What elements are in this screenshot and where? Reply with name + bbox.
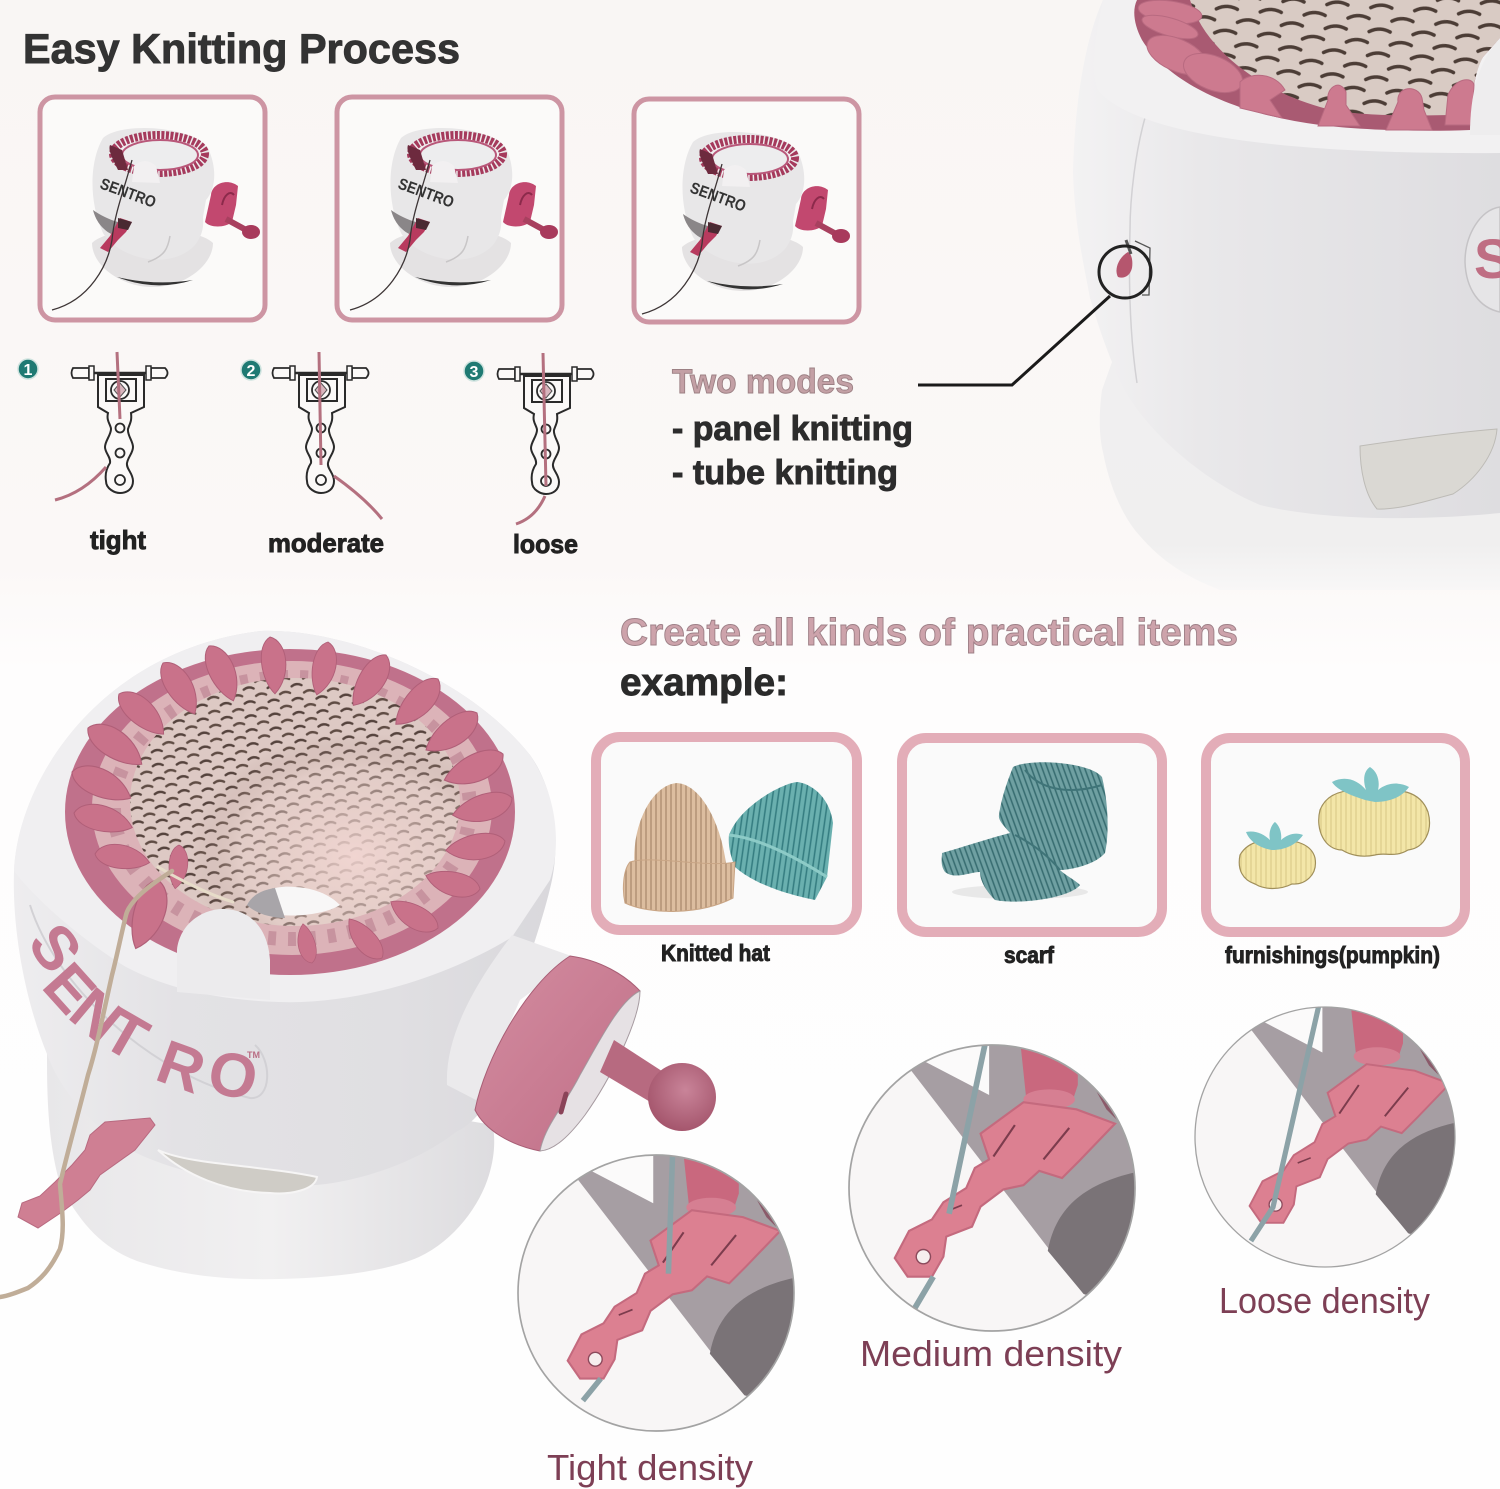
panel: loose density: [1195, 1004, 1468, 1267]
icon: scarf: [942, 762, 1108, 902]
label: tight density: Tight density: [547, 1447, 753, 1488]
text block: two modes: - tube knitting: [672, 454, 898, 492]
panel: tight density: [518, 1152, 808, 1431]
frame: step 1: [40, 97, 265, 320]
front tab: [177, 909, 270, 1000]
label: loose: loose: [513, 529, 578, 559]
ring pegs: [67, 636, 516, 966]
icon: teal hat: [729, 782, 833, 900]
callout: leader line: [918, 296, 1110, 385]
rim lip: [14, 631, 556, 1002]
badge: step 1: 1: [24, 362, 33, 379]
slider tab: [18, 1118, 155, 1228]
heading: example: example:: [620, 662, 788, 704]
caption: scarf: scarf: [1004, 942, 1054, 968]
label: moderate: moderate: [268, 528, 384, 558]
frame: step 3: [634, 99, 859, 322]
mode switch detail: [1099, 240, 1151, 298]
icon: large pumpkin: [1319, 767, 1429, 856]
machine base: [47, 1050, 494, 1279]
crank arm: [447, 935, 577, 1100]
ring pegs: [1137, 0, 1474, 130]
base: [1100, 362, 1500, 590]
frame: step 3: SENTRO: [688, 180, 748, 216]
title: Easy Knitting Process: [23, 25, 460, 72]
badge: step 2: [241, 360, 261, 380]
text block: two modes: Two modes: [672, 363, 854, 401]
label: tight: tight: [90, 525, 146, 555]
main knitting machine: [0, 631, 716, 1297]
badge: step 2: 2: [247, 363, 256, 380]
knit ring: [65, 649, 515, 975]
logo fragment: [1465, 207, 1500, 312]
text block: two modes: [672, 363, 913, 492]
logo: SENTRO: [15, 911, 264, 1115]
base slot: [1360, 429, 1497, 509]
frame: step 2: SENTRO: [396, 176, 456, 212]
diagram: loose: [498, 353, 594, 524]
rim lip: [1094, 0, 1500, 153]
panel: tension diagrams: [18, 352, 594, 559]
frame: step 2: [337, 97, 562, 320]
diagram: tight: [55, 352, 168, 500]
label: loose density: Loose density: [1219, 1280, 1430, 1321]
panel: knitted hat: [596, 737, 857, 930]
body: [1073, 0, 1500, 518]
panel: process step photo frames: [40, 97, 859, 322]
knitted interior: [1134, 0, 1500, 131]
base slot: [158, 1150, 317, 1193]
panel: top-right machine close-up: [1073, 0, 1500, 590]
text block: two modes: - panel knitting: [672, 410, 913, 448]
logo: TM: [247, 1050, 260, 1060]
icon: small pumpkin: [1239, 822, 1315, 888]
yarn: [0, 867, 233, 1297]
diagram: moderate: [272, 352, 382, 519]
caption: knitted hat: Knitted hat: [661, 940, 770, 966]
caption: pumpkin: furnishings(pumpkin): [1225, 942, 1440, 968]
badge: step 3: [464, 361, 484, 381]
panel: scarf: [902, 738, 1162, 932]
crank disc: [475, 956, 716, 1151]
machine body: [14, 631, 556, 1186]
panel: pumpkins: [1206, 738, 1465, 932]
label: medium density: Medium density: [860, 1333, 1122, 1374]
badge: step 3: 3: [470, 364, 479, 381]
heading: create all kinds: Create all kinds of practical items: [620, 612, 1238, 654]
front tab: [1470, 38, 1500, 135]
icon: tan hat: [623, 783, 735, 911]
panel: medium density: [849, 1042, 1149, 1331]
frame: step 1: SENTRO: [98, 176, 158, 212]
badge: step 1: [18, 359, 38, 379]
